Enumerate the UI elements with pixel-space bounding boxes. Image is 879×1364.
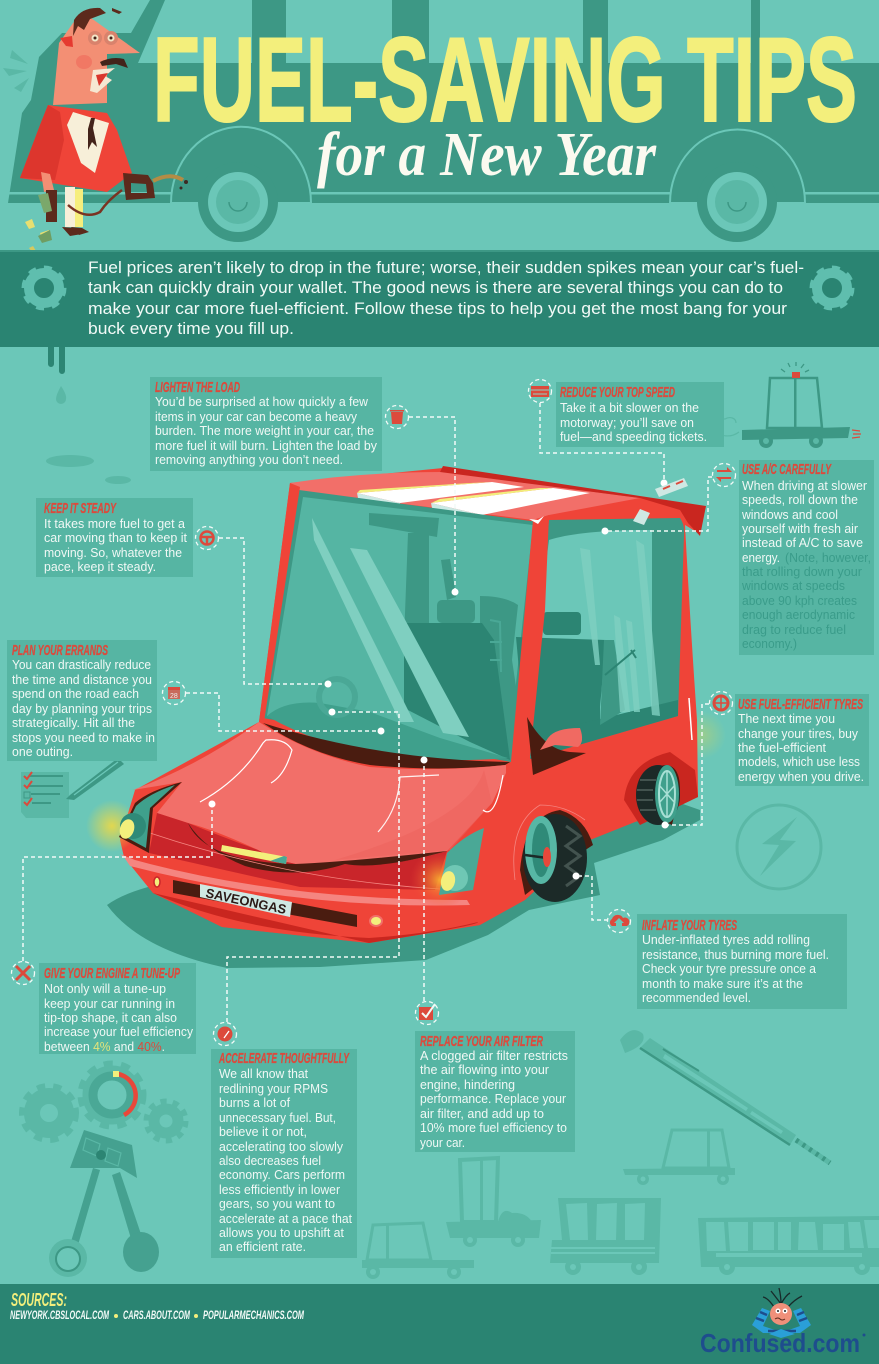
intro text: Fuel prices aren’t likely to drop in the future; worse, their sudden spikes mean your car’s fuel- [88,258,804,277]
rear spoiler [440,466,706,536]
panel: replace your air filter: 10% more fuel efficiency to [420,1121,567,1135]
panel: accelerate thoughtfully: accelerating too slowly [219,1140,344,1154]
panel: plan your errands: spend on the road each [12,687,139,701]
sources heading: SOURCES: [11,1290,67,1310]
panel: keep it steady: It takes more fuel to get a [44,517,185,531]
panel: give your engine a tune-up: between 4% and 40%. [44,1040,165,1054]
panel: keep it steady: pace, keep it steady. [44,560,156,574]
A pillar [508,515,549,775]
grille [149,813,447,890]
panel: accelerate thoughtfully: gears, so you want to [219,1197,335,1211]
source links: POPULARMECHANICS.COM [203,1308,305,1322]
source links: CARS.ABOUT.COM [123,1308,191,1322]
number plate: SAVEONGAS [204,885,288,917]
silhouette: school bus [550,1198,661,1275]
panel: inflate your tyres: Under-inflated tyres add rolling [642,933,810,947]
right headlight [410,828,484,910]
confused.com logo: Confused.com [700,1328,860,1358]
icon: calendar: 28 [170,693,178,700]
panel: lighten the load: more fuel it will burn. Lighten the load by [155,439,378,453]
panel: reduce your top speed: REDUCE YOUR TOP SPEED [560,384,675,401]
intro text: make your car more fuel-efficient. Follow these tips to help you get the most bang for your [88,299,787,318]
panel: lighten the load [150,377,382,471]
panel: plan your errands: one outing. [12,745,73,759]
panel: give your engine a tune-up: GIVE YOUR ENGINE A TUNE-UP [44,965,181,982]
confused.com logo [700,1288,866,1358]
panel: replace your air filter: the air flowing into your [420,1063,549,1077]
header bus illustration [0,0,879,250]
panel: replace your air filter: your car. [420,1136,465,1150]
bumper lines [150,833,440,889]
panel: lighten the load: LIGHTEN THE LOAD [155,379,240,396]
subtitle: for a New Year [317,121,657,189]
checklist and pencil [21,758,124,818]
panel: lighten the load: items in your car can become a heavy [155,410,358,424]
drips and puddles [46,347,131,484]
rear wheel [624,752,698,825]
panel: use fuel-efficient tyres: change your tires, buy [738,727,859,741]
panel: use fuel-efficient tyres: the fuel-efficient [738,741,826,755]
panel: accelerate thoughtfully: unnecessary fuel. But, [219,1111,336,1125]
mouth shading [188,823,447,873]
panel: use a/c carefully: instead of A/C to save [742,536,863,550]
windshield reflections [312,518,469,737]
windshield base [263,723,510,768]
silhouette: top right car [623,1130,735,1185]
icon: tyre [710,692,732,714]
panel: use a/c carefully: above 90 kph creates [742,594,857,608]
panel: use fuel-efficient tyres [735,694,869,786]
panel: use fuel-efficient tyres: The next time you [738,712,835,726]
tyre pressure gauge [620,1030,830,1163]
panel: accelerate thoughtfully: an efficient rate. [219,1240,306,1254]
icon: left gear [26,270,62,306]
panel: use a/c carefully: that rolling down your [742,565,862,579]
icon: piston and rods [49,1130,159,1277]
panel: use a/c carefully: windows at speeds [741,579,845,593]
panel: give your engine a tune-up: keep your car running in [44,997,175,1011]
icon: cloud upload [608,910,630,932]
front bumper [124,857,480,943]
interior seats and mirror [267,513,518,760]
silhouette: car [362,1223,474,1279]
icon: right gear [814,270,850,306]
panel: plan your errands: PLAN YOUR ERRANDS [12,642,108,659]
panel: keep it steady [36,498,193,577]
silhouette: long bus [698,1216,879,1275]
panel: give your engine a tune-up: Not only will a tune-up [44,982,166,996]
panel: give your engine a tune-up: increase your fuel efficiency [44,1025,194,1039]
panel: plan your errands [7,640,157,761]
panel: use a/c carefully: energy. [742,551,780,565]
source links [10,1308,305,1322]
windshield glass [267,497,533,758]
car illustration [86,466,726,968]
panel: plan your errands: You can drastically reduce [12,658,151,672]
panel: reduce your top speed: Take it a bit slower on the [560,401,699,415]
panel: reduce your top speed [556,382,724,447]
side window [516,518,684,760]
vehicle silhouettes [362,1130,879,1279]
police car silhouette [716,362,861,448]
callout connectors [23,403,712,1022]
panel: accelerate thoughtfully: economy. Cars perform [219,1168,345,1182]
panel: accelerate thoughtfully: believe it or not, [219,1125,307,1139]
plate recess [173,880,357,927]
panel: keep it steady: moving. So, whatever the [44,546,182,560]
icon: left gear [23,1087,75,1139]
panel: accelerate thoughtfully: burns a lot of [219,1096,290,1110]
panel: lighten the load: removing anything you don’t need. [155,453,343,467]
left headlight [86,782,182,853]
panel: replace your air filter: A clogged air filter restricts [420,1049,568,1063]
source links: NEWYORK.CBSLOCAL.COM [10,1308,110,1322]
car cabin shell [120,468,704,943]
panel: accelerate thoughtfully: less efficiently in lower [219,1183,340,1197]
icon: trash can [386,406,408,428]
hood highlights [200,740,492,860]
icon: calendar [162,682,186,704]
panel: replace your air filter: REPLACE YOUR AIR FILTER [420,1033,543,1050]
panel: inflate your tyres: recommended level. [642,991,751,1005]
intro band [0,250,879,347]
panel: inflate your tyres [637,914,847,1009]
panel: accelerate thoughtfully: We all know that [219,1067,308,1081]
panel: use a/c carefully [739,460,874,655]
lightning bolt badge [737,805,821,889]
panel: inflate your tyres: Check your tyre pressure once a [642,962,816,976]
intro text: tank can quickly drain your wallet. The good news is there are several things you can do to [88,278,783,297]
brown shade and wing mirror [527,717,586,775]
panel: lighten the load: burden. The more weight in your car, the [155,424,374,438]
panel: use a/c carefully: (Note, however, [785,551,871,565]
panel: plan your errands: day by planning your trips [12,702,152,716]
panel: inflate your tyres: resistance, thus burning more fuel. [642,948,829,962]
panel: accelerate thoughtfully: ACCELERATE THOUGHTFULLY [218,1050,350,1067]
panel: reduce your top speed: motorway; you’ll save on [560,416,694,430]
icon: right gear [147,1102,185,1140]
icon: checkmark [416,1002,438,1024]
panel: accelerate thoughtfully: also decreases fuel [219,1154,321,1168]
icon: speeding ticket [528,380,552,402]
hood [133,722,506,866]
panel: lighten the load: You’d be surprised at how quickly a few [155,395,369,409]
intro text [88,258,804,338]
panel: use a/c carefully: When driving at slower [742,479,867,493]
icon: large gear with red arc [81,1064,143,1126]
roof [290,472,640,520]
panel: replace your air filter [415,1031,575,1152]
roof stripes [357,482,590,519]
yellow bar light [221,845,287,864]
car shadow [107,775,700,968]
panel: reduce your top speed: fuel—and speeding tickets. [560,430,707,444]
panel: use a/c carefully: drag to reduce fuel [742,623,846,637]
panel: use fuel-efficient tyres: models, which use less [738,755,860,769]
panel: plan your errands: stops you need to make in [12,731,155,745]
intro text: buck every time you fill up. [88,319,294,338]
panel: use a/c carefully: speeds, roll down the [742,493,858,507]
panel: plan your errands: strategically. Hit all the [12,716,135,730]
panel: plan your errands: the time and distance you [12,673,152,687]
panel: replace your air filter: air filter, and add up to [420,1107,544,1121]
panel: replace your air filter: performance. Replace your [420,1092,566,1106]
panel: give your engine a tune-up [39,963,196,1054]
panel: accelerate thoughtfully: redlining your RPMS [219,1082,328,1096]
panel: accelerate thoughtfully: allows you to upshift at [219,1226,344,1240]
icon: steering wheel [196,526,218,550]
front wheel [520,810,593,902]
panel: accelerate thoughtfully [211,1049,357,1258]
panel: use a/c carefully: yourself with fresh air [742,522,858,536]
panel: keep it steady: car moving than to keep it [44,531,187,545]
panel: keep it steady: KEEP IT STEADY [44,500,117,517]
gears and piston illustration [23,1064,185,1277]
footer band [0,1284,879,1364]
icon: wrench and screwdriver [12,962,34,984]
panel: inflate your tyres: month to make sure it’s at the [642,977,803,991]
panel: use a/c carefully: economy.) [742,637,797,651]
icon: speedometer [214,1022,236,1046]
panel: give your engine a tune-up: tip-top shape, it can also [44,1011,177,1025]
panel: use a/c carefully: enough aerodynamic [742,608,855,622]
cartoon man with fuel pump [20,8,188,252]
silhouette: truck [446,1158,541,1247]
hair and head [53,8,140,105]
panel: use fuel-efficient tyres: energy when you drive. [738,770,864,784]
fog lights [154,877,382,926]
panel: replace your air filter: engine, hindering [420,1078,515,1092]
panel: inflate your tyres: INFLATE YOUR TYRES [642,917,737,934]
speeding tickets on roof [633,478,688,525]
panel: accelerate thoughtfully: accelerate at a pace that [219,1212,352,1226]
windshield frame [263,490,538,762]
panel: use a/c carefully: windows and cool [741,508,838,522]
icon: a/c arrows [712,464,736,486]
fuel tyre glow [678,711,726,759]
